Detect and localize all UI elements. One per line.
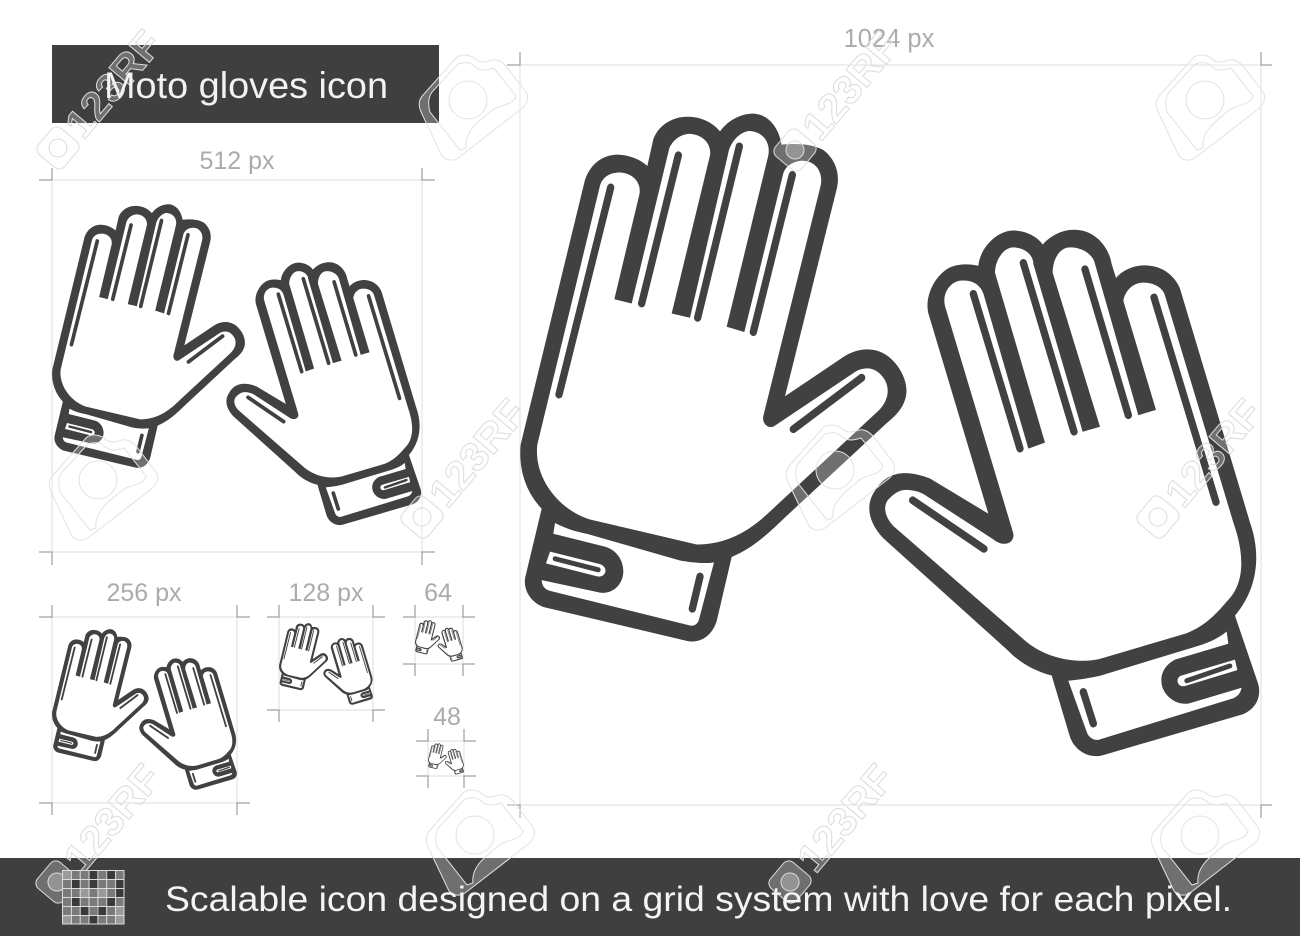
watermarks: 123RF xyxy=(1157,392,1271,516)
icon: pixel grid xyxy=(62,870,124,924)
title banner background xyxy=(52,45,439,123)
watermarks: 123RF xyxy=(56,757,170,881)
size label: 512 px: 512 px xyxy=(199,147,275,175)
title: Moto gloves icon xyxy=(104,65,388,106)
size label: 1024 px: 1024 px xyxy=(844,25,935,53)
panel: 256 px icon xyxy=(39,579,250,815)
panel: 48 px icon xyxy=(416,703,476,788)
size label: 256 px: 256 px xyxy=(106,579,182,607)
panel: 64 px icon xyxy=(403,579,475,676)
watermarks: 123RF xyxy=(421,392,535,516)
size label: 64: 64 xyxy=(424,579,452,607)
footer bar background xyxy=(0,858,1300,936)
icon: 512 px gloves xyxy=(52,204,421,525)
watermarks: 123RF xyxy=(57,23,171,147)
panel: 128 px icon xyxy=(267,579,385,722)
icon: 256 px gloves xyxy=(52,629,237,790)
panel: 512 px icon xyxy=(39,147,435,565)
watermarks: 123RF xyxy=(794,25,908,149)
watermarks: 123RF xyxy=(789,757,903,881)
footer caption: Scalable icon designed on a grid system with love for each pixel. xyxy=(165,880,1232,919)
size label: 128 px: 128 px xyxy=(288,579,364,607)
icon: 64 px gloves xyxy=(415,620,463,662)
size label: 48: 48 xyxy=(433,703,461,731)
icon: large gloves xyxy=(520,114,1259,756)
icon: 48 px gloves xyxy=(428,743,464,775)
icon: 128 px gloves xyxy=(279,623,373,705)
